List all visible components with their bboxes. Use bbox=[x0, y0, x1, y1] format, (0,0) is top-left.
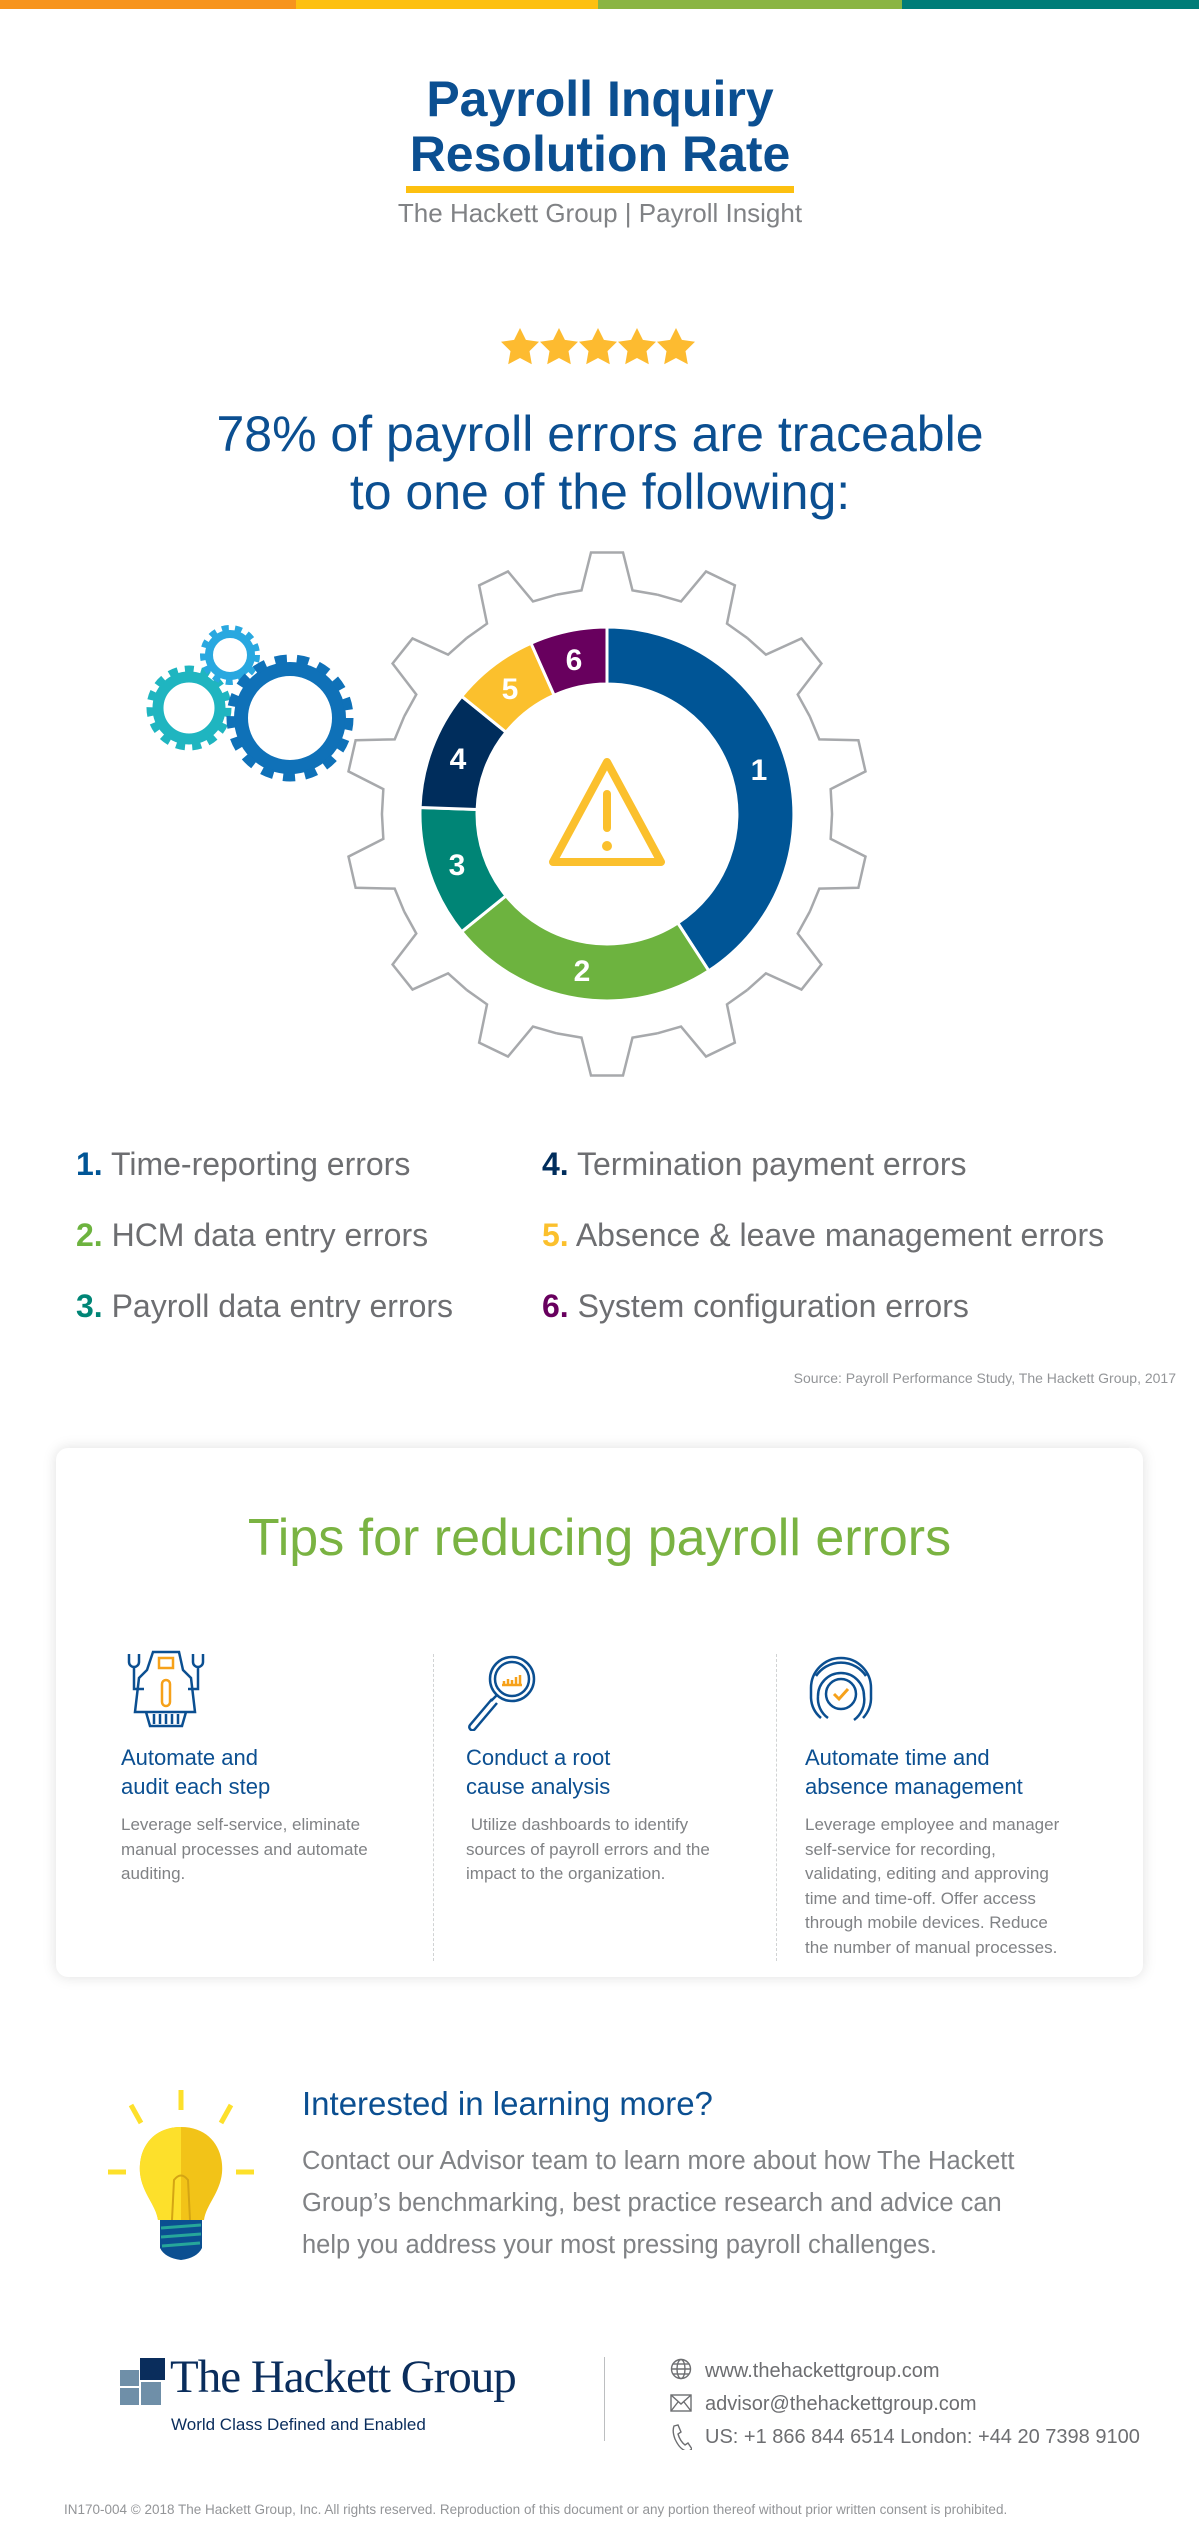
tip 3: Automate time and bbox=[805, 1745, 990, 1770]
tip 3: Leverage employee and manager bbox=[805, 1815, 1059, 1834]
copyright: IN170-004 © 2018 The Hackett Group, Inc. All rights reserved. Reproduction of this document or any portion thereof without prior written consent is prohibited. bbox=[64, 2502, 1007, 2517]
headline: 78% of payroll errors are traceable bbox=[216, 406, 984, 462]
segment numbers: 6 bbox=[566, 644, 582, 677]
tip 1: Automate and bbox=[121, 1745, 258, 1770]
title: Resolution Rate bbox=[410, 126, 790, 182]
legend: 3. Payroll data entry errors bbox=[76, 1288, 453, 1324]
legend: 6. System configuration errors bbox=[542, 1288, 969, 1324]
logo: The Hackett Group bbox=[170, 2351, 516, 2403]
source note: Source: Payroll Performance Study, The Hackett Group, 2017 bbox=[794, 1370, 1176, 1386]
contact info: www.thehackettgroup.com bbox=[705, 2360, 940, 2382]
icon: globe bbox=[670, 2358, 692, 2380]
icon: small gears bbox=[150, 628, 349, 777]
contact text: help you address your most pressing payroll challenges. bbox=[302, 2231, 937, 2259]
legend: 1. Time-reporting errors bbox=[76, 1146, 410, 1182]
title underline bbox=[406, 186, 794, 193]
contact text: Group’s benchmarking, best practice research and advice can bbox=[302, 2189, 1002, 2217]
icon: warning triangle bbox=[553, 762, 661, 862]
big gear outline bbox=[341, 552, 873, 1076]
legend bbox=[76, 1146, 1104, 1324]
icon: robot bbox=[128, 1650, 204, 1728]
tip 3: self-service for recording, bbox=[805, 1840, 996, 1858]
logo: World Class Defined and Enabled bbox=[171, 2415, 426, 2434]
tip 1 bbox=[121, 1745, 368, 1883]
panel: tips: auditing. bbox=[121, 1864, 185, 1883]
contact info bbox=[670, 2358, 1140, 2450]
icon: mail bbox=[670, 2394, 692, 2412]
headline: to one of the following: bbox=[350, 464, 850, 520]
panel: tips bbox=[56, 1448, 1143, 1977]
legend: 4. Termination payment errors bbox=[542, 1146, 966, 1182]
contact info: US: +1 866 844 6514 London: +44 20 7398 9100 bbox=[705, 2426, 1140, 2448]
divider 1 bbox=[433, 1654, 434, 1961]
segment numbers bbox=[449, 644, 767, 988]
icon: light bulb bbox=[108, 2090, 254, 2260]
tip 3: the number of manual processes. bbox=[805, 1938, 1057, 1956]
tip 2: cause analysis bbox=[466, 1774, 610, 1799]
tip 2: Conduct a root bbox=[466, 1745, 610, 1770]
heading: interested: Interested in learning more? bbox=[302, 2085, 713, 2122]
panel: tips: impact to the organization. bbox=[466, 1864, 665, 1883]
chart: gear donut bbox=[146, 551, 867, 1077]
tip 2: sources of payroll errors and the bbox=[466, 1840, 710, 1858]
contact text: Contact our Advisor team to learn more about how The Hackett bbox=[302, 2147, 1014, 2175]
icon: fingerprint bbox=[810, 1656, 872, 1721]
tips heading: Tips for reducing payroll errors bbox=[248, 1509, 951, 1567]
tip 1: audit each step bbox=[121, 1774, 270, 1799]
segment numbers: 3 bbox=[449, 849, 465, 882]
segment numbers: 1 bbox=[751, 754, 767, 787]
tip 2: Utilize dashboards to identify bbox=[471, 1815, 688, 1834]
segment numbers: 4 bbox=[450, 743, 467, 776]
legend: 2. HCM data entry errors bbox=[76, 1217, 428, 1253]
icon: stars bbox=[501, 328, 695, 364]
icon: phone bbox=[672, 2424, 692, 2450]
logo bbox=[120, 2351, 516, 2434]
contact text bbox=[302, 2147, 1014, 2259]
tip 3 bbox=[805, 1745, 1059, 1956]
subtitle: The Hackett Group | Payroll Insight bbox=[398, 198, 802, 228]
tip 1: Leverage self-service, eliminate bbox=[121, 1815, 360, 1834]
contact info: advisor@thehackettgroup.com bbox=[705, 2393, 977, 2415]
title bbox=[410, 71, 790, 182]
tip 1: manual processes and automate bbox=[121, 1840, 368, 1858]
segment numbers: 5 bbox=[502, 673, 518, 706]
title: Payroll Inquiry bbox=[426, 71, 774, 127]
top color bar bbox=[0, 0, 1199, 9]
tip 3: time and time-off. Offer access bbox=[805, 1888, 1036, 1908]
tip 2 bbox=[466, 1745, 710, 1883]
divider bbox=[604, 2357, 605, 2441]
segment numbers: 2 bbox=[574, 955, 590, 988]
headline bbox=[216, 406, 984, 520]
tip 3: absence management bbox=[805, 1774, 1023, 1799]
icon: magnifier bbox=[468, 1656, 536, 1731]
tip 3: through mobile devices. Reduce bbox=[805, 1913, 1048, 1932]
donut segments bbox=[420, 627, 794, 1001]
legend: 5. Absence & leave management errors bbox=[542, 1217, 1104, 1253]
tip 3: validating, editing and approving bbox=[805, 1864, 1049, 1883]
divider 2 bbox=[776, 1654, 777, 1961]
